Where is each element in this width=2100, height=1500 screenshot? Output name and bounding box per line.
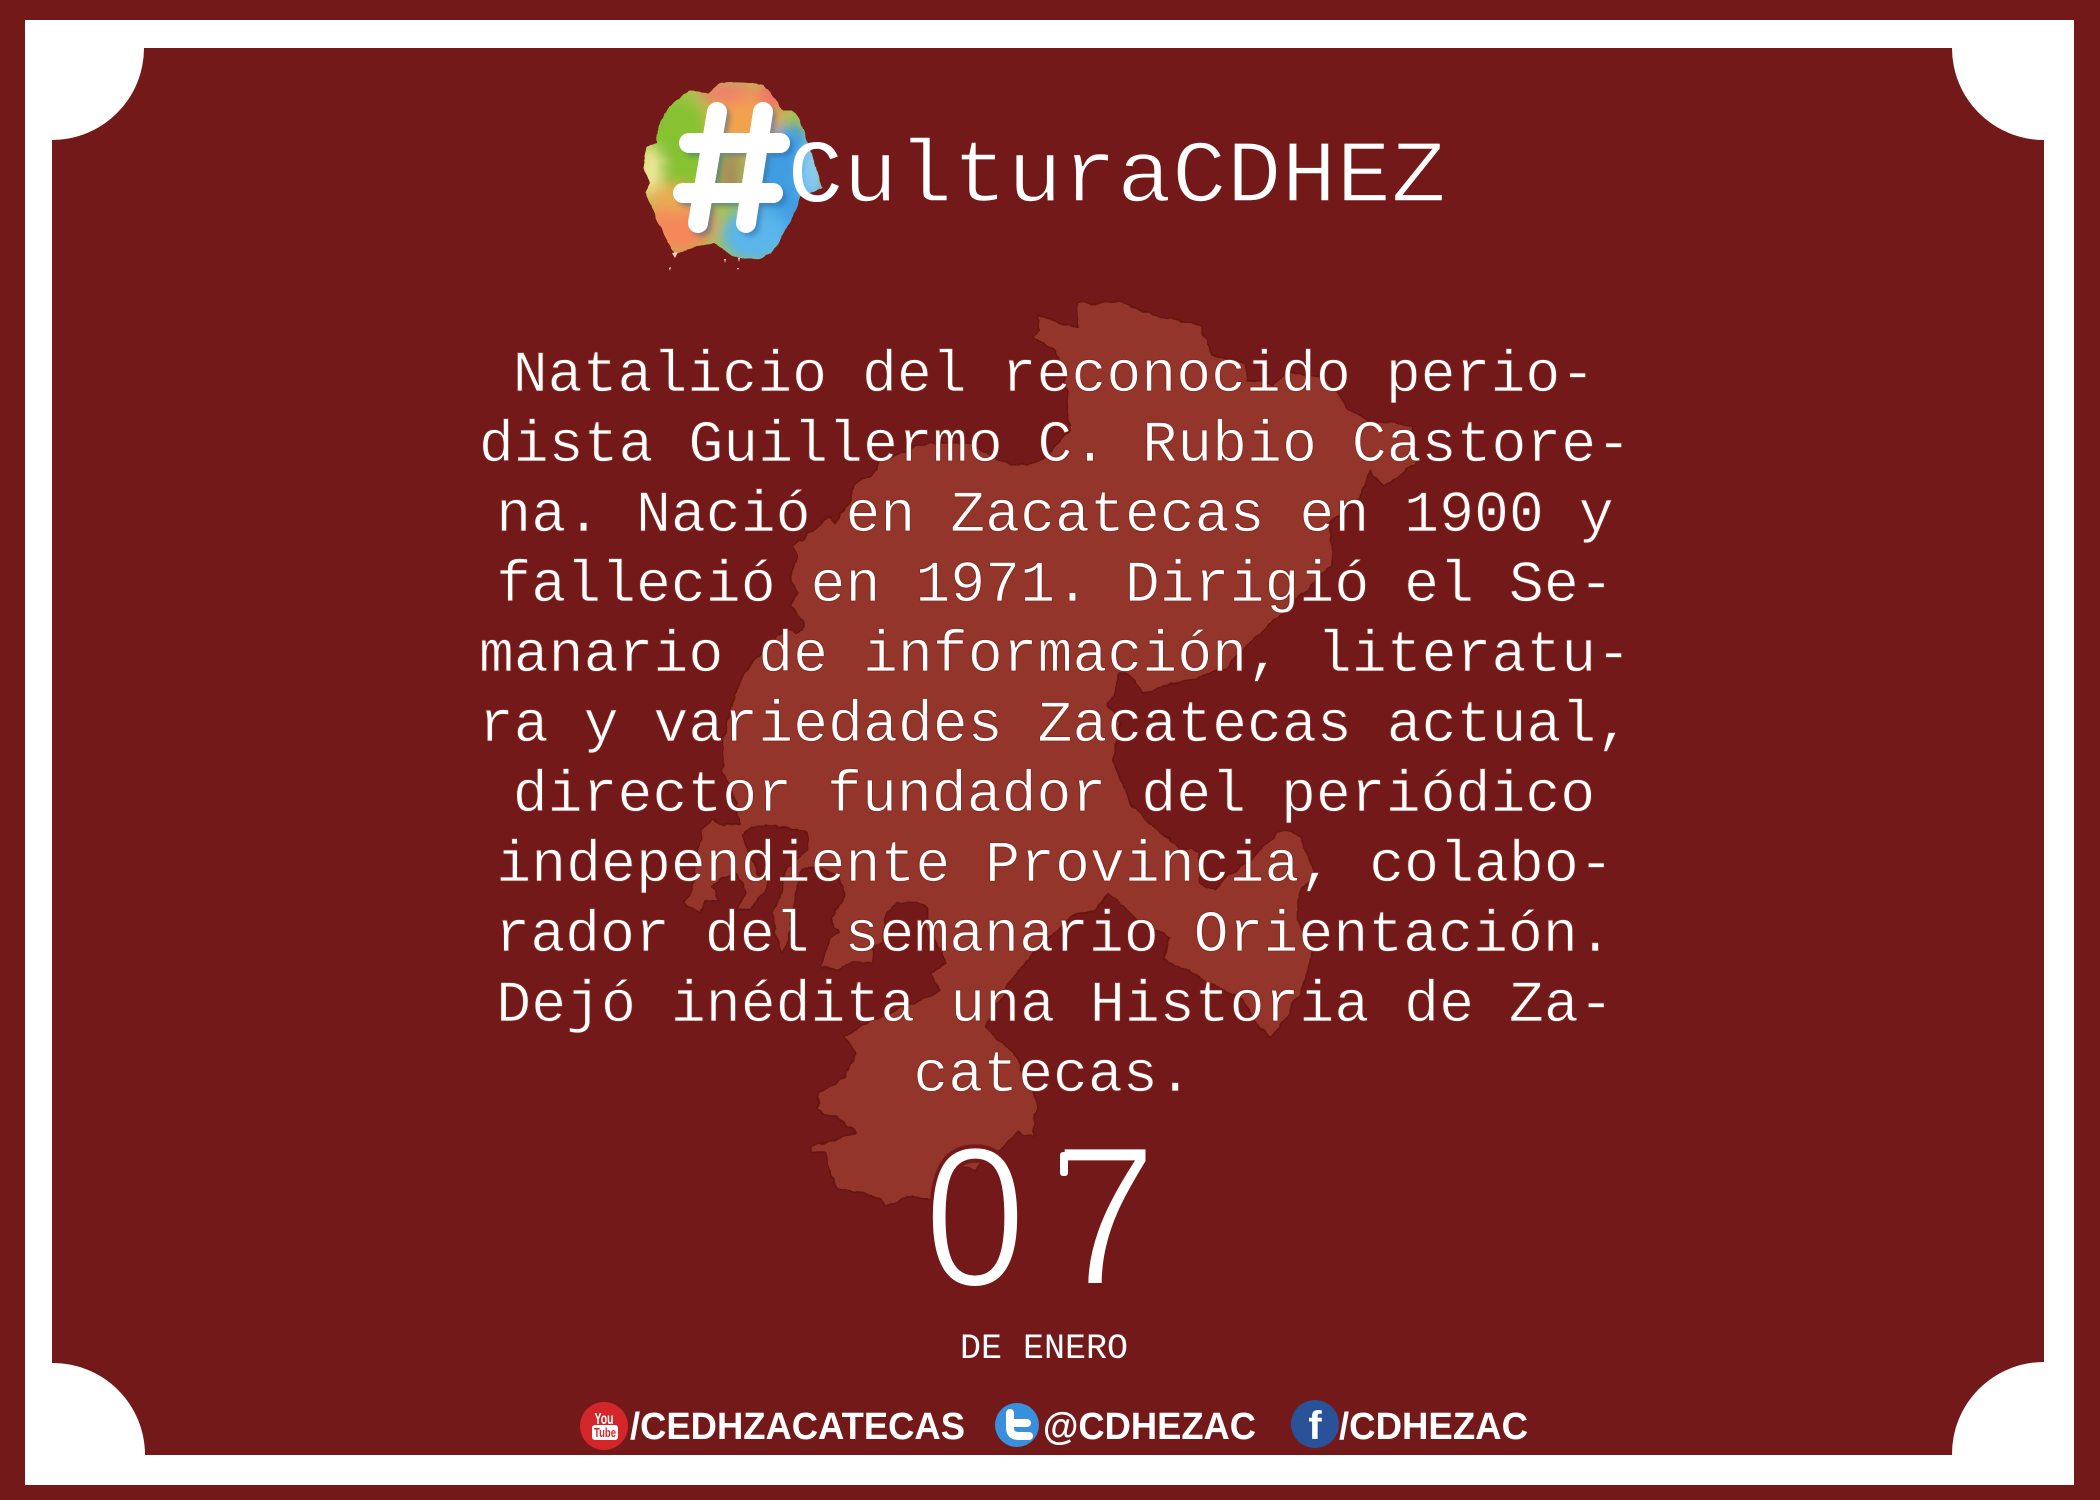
body text: manario de información, literatu- xyxy=(479,624,1631,689)
date number xyxy=(924,1104,1157,1329)
body text: falleció en 1971. Dirigió el Se- xyxy=(496,554,1614,619)
map of Zacatecas silhouette xyxy=(683,302,1415,1205)
title: CulturaCDHEZ xyxy=(788,129,1446,228)
social: facebook xyxy=(1291,1400,1528,1448)
body text: Natalicio del reconocido perio- xyxy=(513,344,1595,409)
social: facebook: /CDHEZAC xyxy=(1339,1406,1528,1448)
body text: catecas. xyxy=(913,1044,1193,1109)
body text: na. Nació en Zacatecas en 1900 y xyxy=(496,484,1614,549)
icon: watercolor hashtag xyxy=(644,82,822,271)
social: facebook: f xyxy=(1308,1404,1322,1448)
date number: 0 xyxy=(924,1105,1026,1329)
date number: 7 xyxy=(1053,1104,1157,1327)
body text: dista Guillermo C. Rubio Castore- xyxy=(479,414,1631,479)
social: youtube: /CEDHZACATECAS xyxy=(630,1406,965,1448)
icon: blob drips xyxy=(669,252,740,271)
body text: rador del semanario Orientación. xyxy=(495,904,1613,969)
icon: hash mark xyxy=(683,112,780,223)
body text: ra y variedades Zacatecas actual, xyxy=(479,694,1631,759)
social: twitter: @CDHEZAC xyxy=(1043,1406,1256,1448)
body text: Dejó inédita una Historia de Za- xyxy=(496,974,1614,1039)
body text: independiente Provincia, colabo- xyxy=(496,834,1614,899)
icon: hash shadow xyxy=(687,116,784,227)
body text: director fundador del periódico xyxy=(513,764,1595,829)
social: youtube: You xyxy=(594,1411,614,1428)
date month: DE ENERO xyxy=(960,1329,1128,1369)
social: youtube: Tube xyxy=(594,1425,616,1440)
body text xyxy=(479,344,1631,1109)
